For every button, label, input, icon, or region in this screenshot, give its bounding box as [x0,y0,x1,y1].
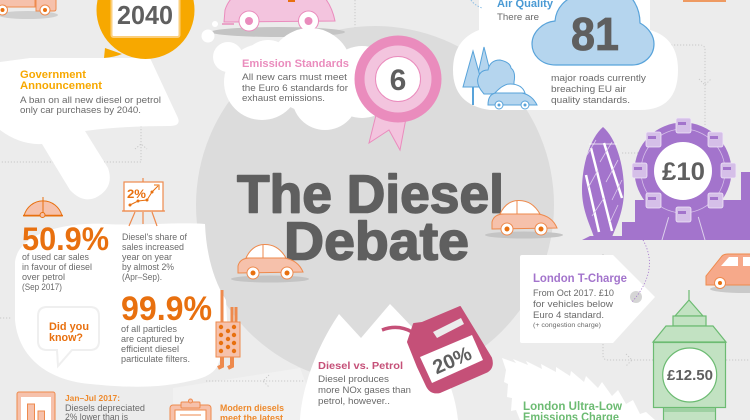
icon: tablet chart [17,392,55,420]
callout: did you know [38,307,99,366]
share text line 5: (Apr–Sep). [122,272,162,283]
skyline base [582,172,750,240]
share text line 3: year on year [122,252,172,263]
heading: London T-Charge [533,273,627,285]
bubble background [453,0,678,110]
icon: particulate filter [216,290,240,368]
panel: London ultra-low emissions charge [502,358,655,420]
body text: Diesels depreciated [65,403,145,414]
heading: Jan–Jul 2017: [65,393,120,403]
icon: 2040 speech bubble [96,0,194,59]
stat: 99.9%: 99.9% [121,290,212,328]
share text line 4: by almost 2% [122,262,174,273]
icon: orange van [706,254,750,293]
icon: car by title right [485,200,563,238]
share text: Diesel's share of [122,232,187,243]
body text: A ban on all new diesel or petrol [20,95,161,106]
icon: rosette: 6 [390,64,406,97]
particle text line 3: efficient diesel [121,344,179,355]
icon: car by title left [231,244,309,282]
stat: 50.9%: 50.9% [22,221,109,257]
tag hole and string [630,240,649,303]
icon: gauge [23,197,63,218]
tag background [520,255,655,343]
footnote: (+ congestion charge) [533,323,601,329]
icon: cloud with 81 [532,0,654,65]
panel: emission standards [213,28,442,150]
title: The Diesel [237,164,504,224]
body text line 2: for vehicles below [533,299,613,310]
central grey circle [196,26,554,384]
icon: cloud with 81: 81 [571,8,619,60]
stat text line 4: (Sep 2017) [22,282,62,293]
body text: major roads currently [551,73,646,84]
stat text line 3: over petrol [22,272,65,283]
megaphone background [0,58,179,199]
wheel [634,122,732,220]
body text: Diesel produces [318,374,389,385]
panel: air quality [453,0,678,110]
share text line 2: sales increased [122,242,184,253]
body text line 3: quality standards. [551,95,630,106]
body text line 3: exhaust emissions. [242,93,325,104]
callout: did you know: Did you [49,321,89,333]
particle text line 4: particulate filters. [121,354,190,365]
icon: London skyline with T-Charge fee [582,118,750,240]
legs [662,216,705,240]
gherkin [582,127,624,237]
icon: presentation chart: 2% [127,187,146,201]
heading: Modern diesels [220,403,284,413]
flame background [300,304,458,420]
heading line 2: Announcement [20,80,102,92]
title line 2: Debate [284,212,469,272]
body text: From Oct 2017. £10 [533,288,614,299]
body text line 2: breaching EU air [551,84,626,95]
title [237,164,504,272]
particle text: of all particles [121,324,177,335]
icon: truck at top left [0,0,58,19]
icon: jerrycan 20% [382,307,492,392]
heading: London Ultra-Low [523,401,622,413]
heading: Emission Standards [242,58,349,70]
icon: 2040 speech bubble: 2040 [117,0,173,30]
panel: government announcement [0,0,194,199]
stat text: of used car sales [22,252,89,263]
heading: Government [20,69,86,81]
body text line 2: only car purchases by 2040. [20,105,141,116]
orange rule at top right [683,0,726,2]
icon: Big Ben with charge: £12.50 [667,367,713,384]
text: there are: There are [497,12,539,23]
panel: diesel vs petrol [300,304,492,420]
icon: London skyline with T-Charge fee: £10 [662,158,705,186]
body text line 2: more NOx gases than [318,385,411,396]
spiky background [502,358,655,420]
body text line 2: the Euro 6 standards for [242,83,348,94]
icon: clipboard [170,399,211,420]
icon: jerrycan 20%: 20% [430,343,475,379]
gondolas [632,118,736,222]
callout: did you know: know? [49,332,83,344]
cloud background [213,28,398,130]
particle text line 2: are captured by [121,334,184,345]
icon: rosette [354,36,442,150]
panel: modern diesels [170,399,284,420]
stat text line 2: in favour of diesel [22,262,92,273]
white blob background [15,223,228,387]
icon: presentation chart [122,178,165,226]
panel: London T-Charge tag [520,240,655,343]
icon: trees and blue car [463,47,537,109]
panel: used car statistics [15,178,240,387]
body text line 3: Euro 4 standard. [533,310,604,321]
icon: pink car [202,0,345,42]
heading: Diesel vs. Petrol [318,360,403,372]
panel: depreciation [17,392,145,420]
body text: All new cars must meet [242,72,347,83]
icon: Big Ben with charge [653,290,726,420]
body text line 3: petrol, however.. [318,396,390,407]
